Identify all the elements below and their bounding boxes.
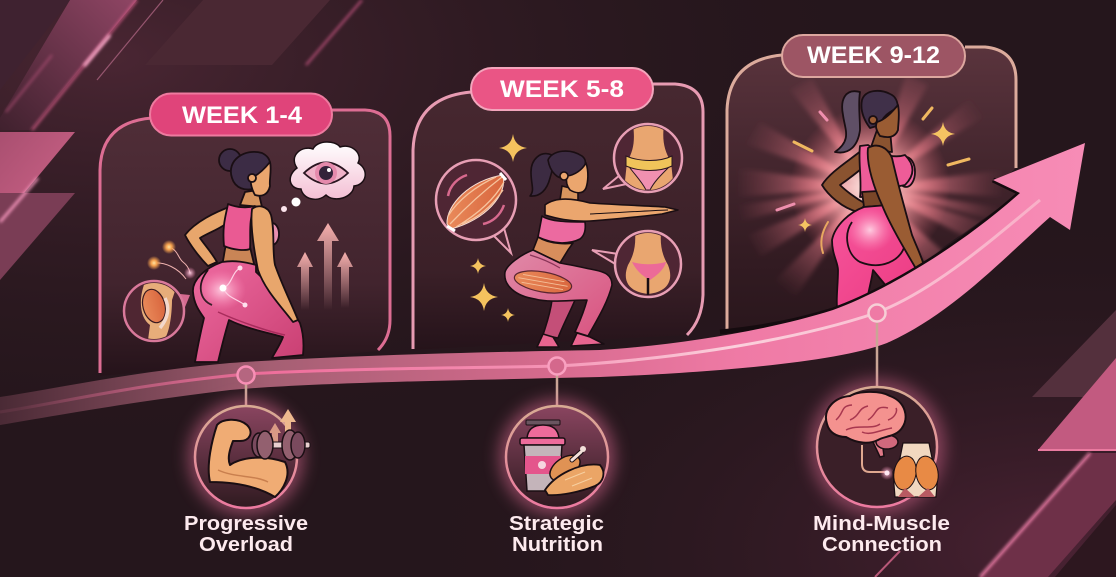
- connector lines: [246, 323, 877, 407]
- progress arrows: [297, 223, 353, 310]
- panel frame: week 1-4: [100, 110, 390, 376]
- timeline node 2: [548, 358, 566, 374]
- panel frame: week 5-8: [413, 84, 703, 350]
- label: mind-muscle connection: Connection: [822, 534, 942, 556]
- timeline node 1: [238, 366, 254, 384]
- label: strategic nutrition: Strategic: [509, 513, 604, 535]
- icon: progressive overload: [188, 399, 310, 515]
- label: progressive overload: [184, 513, 308, 556]
- radiant sunburst: [744, 78, 996, 290]
- growth ribbon arrow: [0, 143, 1085, 425]
- heading: week 1-4: WEEK 1-4: [182, 102, 303, 129]
- nerve sparks: [147, 240, 196, 279]
- heading: week 5-8: WEEK 5-8: [500, 76, 624, 103]
- heading: week 1-4: [150, 94, 332, 136]
- label: strategic nutrition: Nutrition: [512, 534, 603, 556]
- gold sparkles: [470, 134, 527, 322]
- figure: woman with toned glutes: [822, 91, 925, 307]
- figure: woman standing with hand on hip: [185, 149, 304, 362]
- heading: week 5-8: [471, 68, 653, 110]
- label: progressive overload: Overload: [199, 534, 293, 556]
- inset: glute shape bubble: [592, 231, 681, 297]
- label: progressive overload: Progressive: [184, 513, 308, 535]
- label: strategic nutrition: [509, 513, 604, 556]
- inset: waist measurement bubble: [603, 124, 682, 192]
- inset: glute muscle: [124, 281, 190, 341]
- label: mind-muscle connection: Mind-Muscle: [813, 513, 950, 535]
- celebration dashes and stars: [777, 108, 969, 253]
- heading: week 9-12: [782, 35, 965, 77]
- thought bubble with eye: [281, 142, 365, 212]
- heading: week 9-12: WEEK 9-12: [807, 42, 940, 69]
- panel: week 9-12: [727, 47, 1020, 335]
- icon: strategic nutrition: [499, 399, 615, 515]
- icon: mind-muscle connection: [809, 379, 945, 515]
- glute activation glow: [198, 266, 248, 310]
- label: mind-muscle connection: [813, 513, 950, 556]
- timeline node 3: [868, 304, 886, 322]
- panel: week 1-4: [100, 110, 390, 376]
- panel: week 5-8: [413, 84, 703, 350]
- panel frame: week 9-12: [727, 47, 1020, 335]
- inset: muscle fibre bubble: [436, 160, 516, 253]
- figure: woman squatting: [505, 151, 678, 347]
